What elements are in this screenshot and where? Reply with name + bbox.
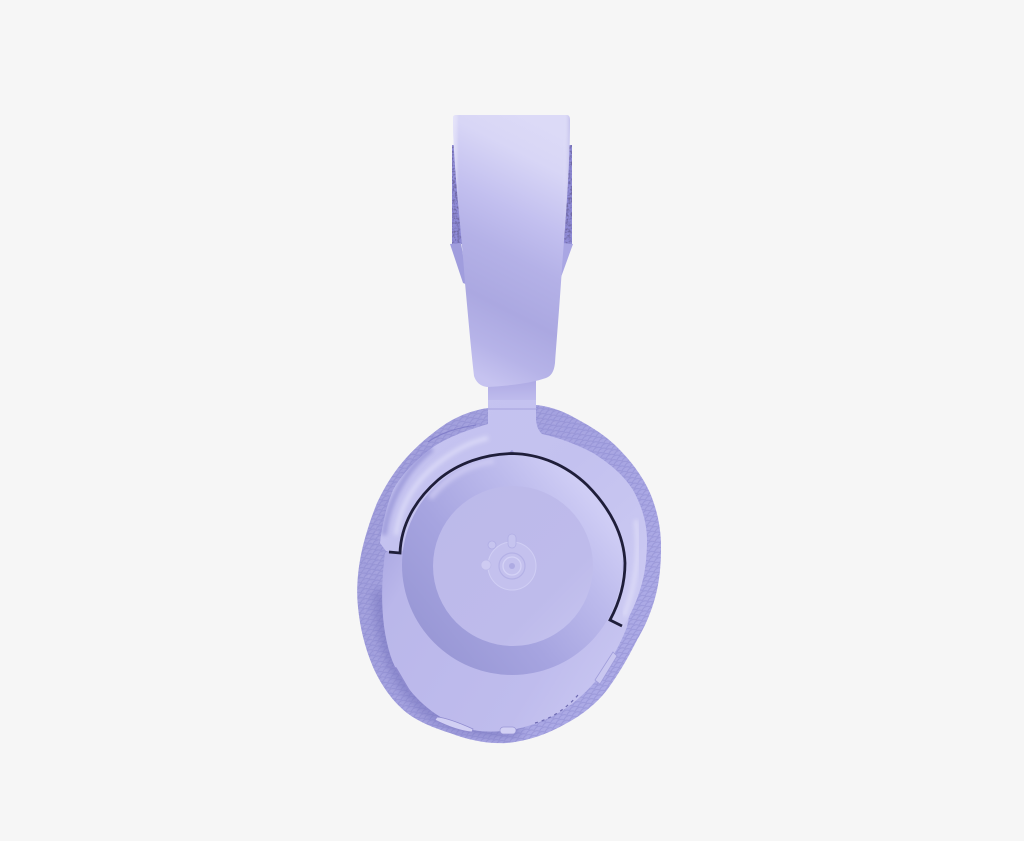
stem joint line [488, 408, 536, 410]
disc face [433, 486, 593, 646]
headband fabric [452, 145, 572, 244]
ear cushion [357, 405, 661, 743]
stem [480, 380, 552, 442]
cushion shadow [380, 590, 520, 732]
arc highlight [624, 520, 638, 616]
illustration: lavender headset side view [357, 115, 661, 744]
upper arc band [380, 400, 647, 627]
black slit arc [389, 454, 625, 626]
headband wings [450, 243, 573, 285]
ear cup buttons [386, 652, 617, 734]
lower shell [382, 480, 640, 732]
cushion stitch texture [350, 400, 670, 750]
logo [481, 534, 536, 590]
ear cup disc [402, 455, 622, 675]
headband [453, 115, 570, 387]
